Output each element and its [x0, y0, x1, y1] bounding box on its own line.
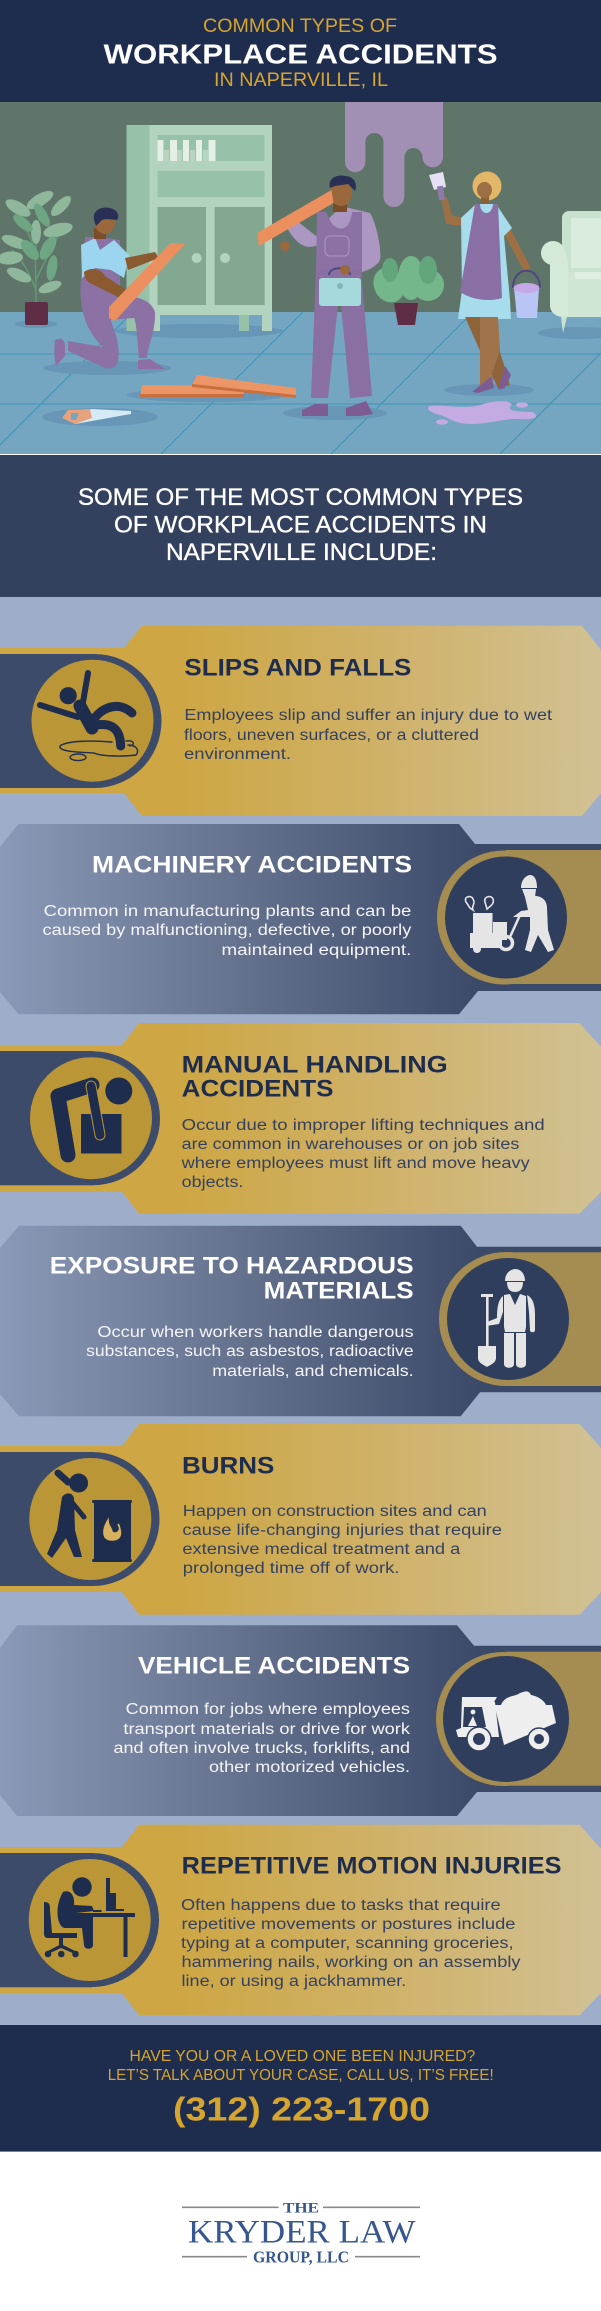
description: Occur when workers handle dangerous: [97, 1324, 414, 1341]
intro heading: OF WORKPLACE ACCIDENTS IN: [114, 512, 487, 539]
description: hammering nails, working on an assembly: [182, 1954, 521, 1971]
panel: slips and falls: [0, 626, 601, 816]
icon: worker with machine: [445, 856, 567, 978]
heading: SLIPS AND FALLS: [184, 654, 411, 681]
description: where employees must lift and move heavy: [181, 1155, 530, 1172]
description: Happen on construction sites and can: [183, 1503, 487, 1520]
description: Common in manufacturing plants and can be: [44, 903, 411, 920]
title line 3: IN NAPERVILLE, IL: [214, 69, 388, 91]
description: environment.: [184, 746, 291, 763]
title line 2: WORKPLACE ACCIDENTS: [104, 38, 498, 69]
description: [181, 1117, 545, 1191]
description: typing at a computer, scanning groceries,: [181, 1935, 514, 1952]
saw: [62, 409, 131, 424]
intro heading: NAPERVILLE INCLUDE:: [166, 539, 437, 566]
description: cause life-changing injuries that require: [182, 1522, 502, 1539]
heading: MATERIALS: [264, 1277, 414, 1304]
description: Often happens due to tasks that require: [181, 1897, 501, 1914]
page background: [0, 597, 601, 2025]
heading: MACHINERY ACCIDENTS: [92, 852, 412, 879]
plant: left: [0, 187, 74, 325]
panel: burns: [0, 1424, 601, 1615]
paint puddle: [428, 401, 536, 424]
footer background: [0, 2152, 601, 2311]
title line 1: COMMON TYPES OF: [203, 15, 397, 37]
man kneeling with board: [54, 208, 185, 369]
description: maintained equipment.: [222, 942, 411, 959]
description: other motorized vehicles.: [209, 1759, 410, 1776]
armchair: [541, 211, 601, 333]
description: line, or using a jackhammer.: [182, 1973, 406, 1990]
heading: REPETITIVE MOTION INJURIES: [182, 1853, 561, 1880]
icon: person slipping: [32, 660, 154, 782]
panel: machinery accidents: [0, 824, 601, 1014]
description: [184, 707, 553, 763]
call to action text: LET’S TALK ABOUT YOUR CASE, CALL US, IT’S FREE!: [108, 2067, 494, 2084]
intro heading: [78, 484, 523, 566]
description: caused by malfunctioning, defective, or poorly: [42, 922, 412, 939]
description: Employees slip and suffer an injury due to wet: [184, 707, 553, 724]
paint bucket: [513, 271, 540, 318]
intro heading: SOME OF THE MOST COMMON TYPES: [78, 484, 523, 511]
icon: dump truck: [443, 1656, 569, 1782]
description: Common for jobs where employees: [126, 1701, 410, 1718]
cabinet: [126, 125, 272, 331]
heading: ACCIDENTS: [182, 1076, 334, 1103]
heading: [182, 1051, 448, 1103]
description: repetitive movements or postures include: [182, 1916, 516, 1933]
paint brush: [429, 172, 446, 200]
description: transport materials or drive for work: [123, 1721, 410, 1738]
icon: person beside burning barrel: [29, 1458, 151, 1580]
description: [86, 1324, 414, 1380]
header banner: [0, 0, 601, 102]
call to action text: [108, 2048, 494, 2084]
panel: repetitive motion injuries: [0, 1825, 601, 2015]
description: [42, 903, 412, 959]
description: floors, uneven surfaces, or a cluttered: [184, 727, 479, 744]
description: substances, such as asbestos, radioactive: [86, 1343, 414, 1360]
heading: [50, 1252, 414, 1304]
heading: VEHICLE ACCIDENTS: [138, 1652, 410, 1679]
description: [114, 1701, 410, 1776]
floor boards: [140, 375, 296, 398]
heading: BURNS: [182, 1452, 274, 1479]
description: and often involve trucks, forklifts, and: [114, 1740, 410, 1757]
call to action text: HAVE YOU OR A LOVED ONE BEEN INJURED?: [130, 2048, 476, 2065]
description: Occur due to improper lifting techniques and: [182, 1117, 545, 1134]
description: prolonged time off of work.: [183, 1560, 399, 1577]
description: objects.: [182, 1174, 243, 1191]
logo: The Kryder Law Group: GROUP, LLC: [253, 2248, 349, 2267]
man standing with board and toolbox: [257, 176, 380, 416]
heading: MANUAL HANDLING: [182, 1051, 448, 1078]
icon: worker with shovel: [447, 1258, 569, 1380]
woman painting: [429, 172, 540, 393]
logo: The Kryder Law Group: KRYDER LAW: [188, 2215, 416, 2251]
call to action banner: [0, 2025, 601, 2152]
description: are common in warehouses or on job sites: [182, 1136, 520, 1153]
description: materials, and chemicals.: [212, 1363, 414, 1380]
icon: person lifting box: [30, 1057, 152, 1179]
panel: vehicle accidents: [0, 1625, 601, 1816]
paint drip: [345, 102, 443, 207]
icon: person at desk: [29, 1859, 151, 1981]
panel: exposure to hazardous materials: [0, 1226, 601, 1416]
heading: EXPOSURE TO HAZARDOUS: [50, 1252, 414, 1279]
board on shoulder: [257, 190, 334, 246]
illustration: workers in a workplace: [0, 102, 601, 454]
panel: manual handling accidents: [0, 1023, 601, 1214]
board held: [109, 243, 185, 321]
plant: centre: [368, 256, 444, 325]
logo: The Kryder Law Group: THE: [283, 2201, 319, 2217]
phone number: (312) 223-1700: [173, 2091, 430, 2128]
description: [181, 1897, 521, 1990]
toolbox: [319, 268, 361, 306]
intro panel: [0, 455, 601, 597]
description: [182, 1503, 502, 1577]
description: extensive medical treatment and a: [182, 1541, 461, 1558]
logo: The Kryder Law Group: [182, 2201, 420, 2267]
